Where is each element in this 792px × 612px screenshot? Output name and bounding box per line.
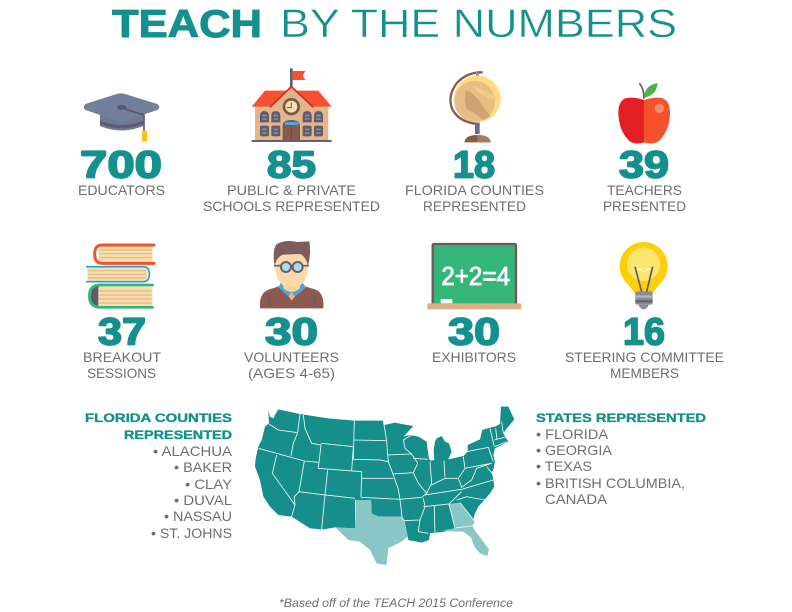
icon: chalkboard: 2+2=4 — [441, 261, 510, 291]
list: states represented: • TEXAS — [536, 459, 592, 474]
map: Texas highlighted — [336, 500, 408, 565]
list: Florida counties represented: • BAKER — [174, 460, 232, 475]
map: teal states — [255, 407, 514, 543]
stat: 39 teachers — [603, 83, 686, 214]
stat: 39 teachers: PRESENTED — [603, 199, 686, 214]
stat: 16 steering committee: STEERING COMMITTEE — [565, 350, 724, 365]
list: states represented: STATES REPRESENTED — [536, 411, 706, 425]
stat: 16 steering committee: 16 — [623, 312, 665, 354]
stat: 18 counties: FLORIDA COUNTIES — [405, 183, 544, 198]
list: states represented: • GEORGIA — [536, 443, 613, 458]
stat: 18 counties: 18 — [453, 144, 495, 186]
list: states represented: • BRITISH COLUMBIA, — [536, 476, 685, 491]
icon: graduation cap — [84, 93, 159, 142]
stat: 85 schools: SCHOOLS REPRESENTED — [203, 199, 380, 214]
icon: volunteer with glasses — [260, 241, 323, 308]
list: states represented: CANADA — [545, 492, 608, 507]
stat: 37 breakout sessions: SESSIONS — [87, 366, 156, 381]
stat: 700 educators — [78, 93, 165, 198]
title: BY THE NUMBERS — [280, 2, 677, 46]
map: contiguous United States — [255, 407, 514, 565]
stat: 85 schools — [203, 68, 380, 214]
stat: 18 counties — [405, 72, 544, 214]
icon: globe — [450, 72, 501, 142]
list: states represented — [536, 411, 706, 507]
stat: 700 educators: 700 — [80, 144, 162, 186]
stat: 16 steering committee — [565, 242, 724, 381]
stat: 39 teachers: 39 — [619, 144, 669, 186]
icon: apple — [618, 83, 670, 144]
stat: 85 schools: PUBLIC & PRIVATE — [227, 183, 356, 198]
list: Florida counties represented: • ST. JOHNS — [151, 526, 232, 541]
stat: 30 volunteers: (AGES 4-65) — [248, 366, 335, 381]
stat: 18 counties: REPRESENTED — [423, 199, 526, 214]
stat: 85 schools: 85 — [267, 144, 316, 186]
footnote: *Based off of the TEACH 2015 Conference — [279, 598, 513, 610]
list: Florida counties represented: • DUVAL — [174, 493, 232, 508]
stat: 37 breakout sessions — [83, 245, 161, 381]
list: Florida counties represented: • NASSAU — [164, 509, 232, 524]
icon: light bulb — [620, 242, 668, 309]
stat: 30 exhibitors — [427, 244, 521, 365]
list: states represented: • FLORIDA — [536, 427, 609, 442]
stat: 30 volunteers — [244, 241, 339, 381]
map: state borders — [258, 414, 507, 535]
stat: 30 exhibitors: EXHIBITORS — [432, 350, 516, 365]
icon: schoolhouse — [252, 68, 332, 141]
list: Florida counties represented: FLORIDA COUNTIES — [85, 411, 232, 425]
list: Florida counties represented: REPRESENTED — [124, 428, 232, 442]
icon: stack of books — [87, 245, 154, 307]
list: Florida counties represented: • ALACHUA — [153, 444, 233, 459]
list: Florida counties represented: • CLAY — [185, 477, 232, 492]
stat: 16 steering committee: MEMBERS — [610, 366, 679, 381]
stat: 700 educators: EDUCATORS — [78, 183, 165, 198]
stat: 30 volunteers: 30 — [265, 312, 318, 354]
stat: 30 exhibitors: 30 — [448, 312, 500, 354]
title: TEACH — [112, 3, 262, 46]
stat: 37 breakout sessions: 37 — [98, 312, 146, 354]
title — [112, 2, 677, 46]
stat: 39 teachers: TEACHERS — [607, 183, 682, 198]
stat: 30 volunteers: VOLUNTEERS — [244, 350, 339, 365]
map: Georgia and Florida highlighted — [442, 503, 489, 556]
list: Florida counties represented — [85, 411, 233, 541]
stat: 37 breakout sessions: BREAKOUT — [83, 350, 161, 365]
